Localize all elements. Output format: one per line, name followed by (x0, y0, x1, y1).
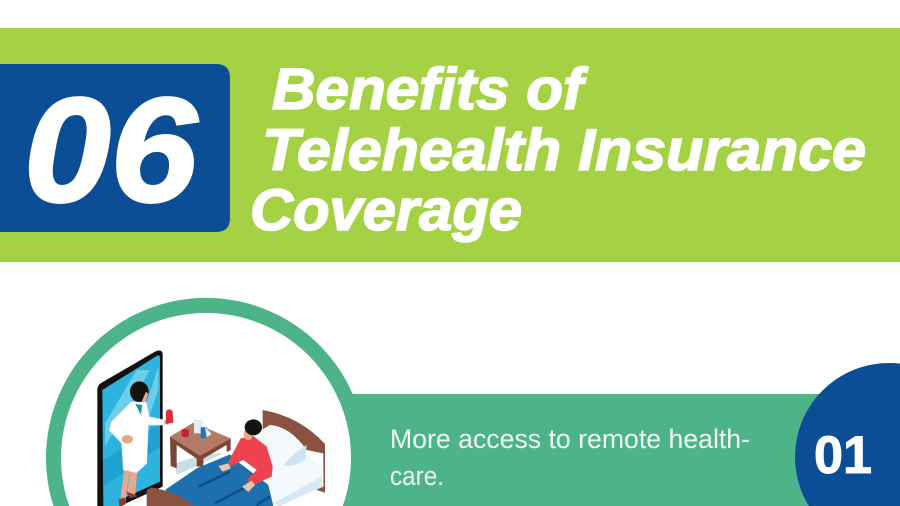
benefit text: care. (390, 461, 444, 491)
title: Coverage (250, 178, 522, 243)
doctor (109, 381, 173, 506)
title (250, 57, 866, 243)
slippers (122, 497, 143, 506)
number circle: 01 (795, 363, 900, 506)
number circle: 01: 01 (814, 426, 872, 485)
illustration: telehealth doctor and patient (97, 351, 325, 506)
title: Telehealth Insurance (262, 118, 866, 183)
benefit text (390, 424, 750, 491)
footboard (147, 487, 194, 506)
ring (46, 298, 366, 506)
phone (97, 351, 163, 506)
number badge: 06 (0, 64, 230, 233)
title: Benefits of (272, 57, 589, 122)
blanket (165, 454, 273, 506)
panel: title banner (0, 28, 900, 262)
panel: benefit 01 (46, 298, 900, 506)
blanket folds (198, 472, 270, 505)
bed (257, 410, 325, 506)
number badge: 06: 06 (24, 68, 199, 233)
bedside table (170, 419, 231, 475)
benefit band (300, 394, 860, 506)
benefit text: More access to remote health- (390, 424, 750, 454)
patient (218, 419, 273, 492)
